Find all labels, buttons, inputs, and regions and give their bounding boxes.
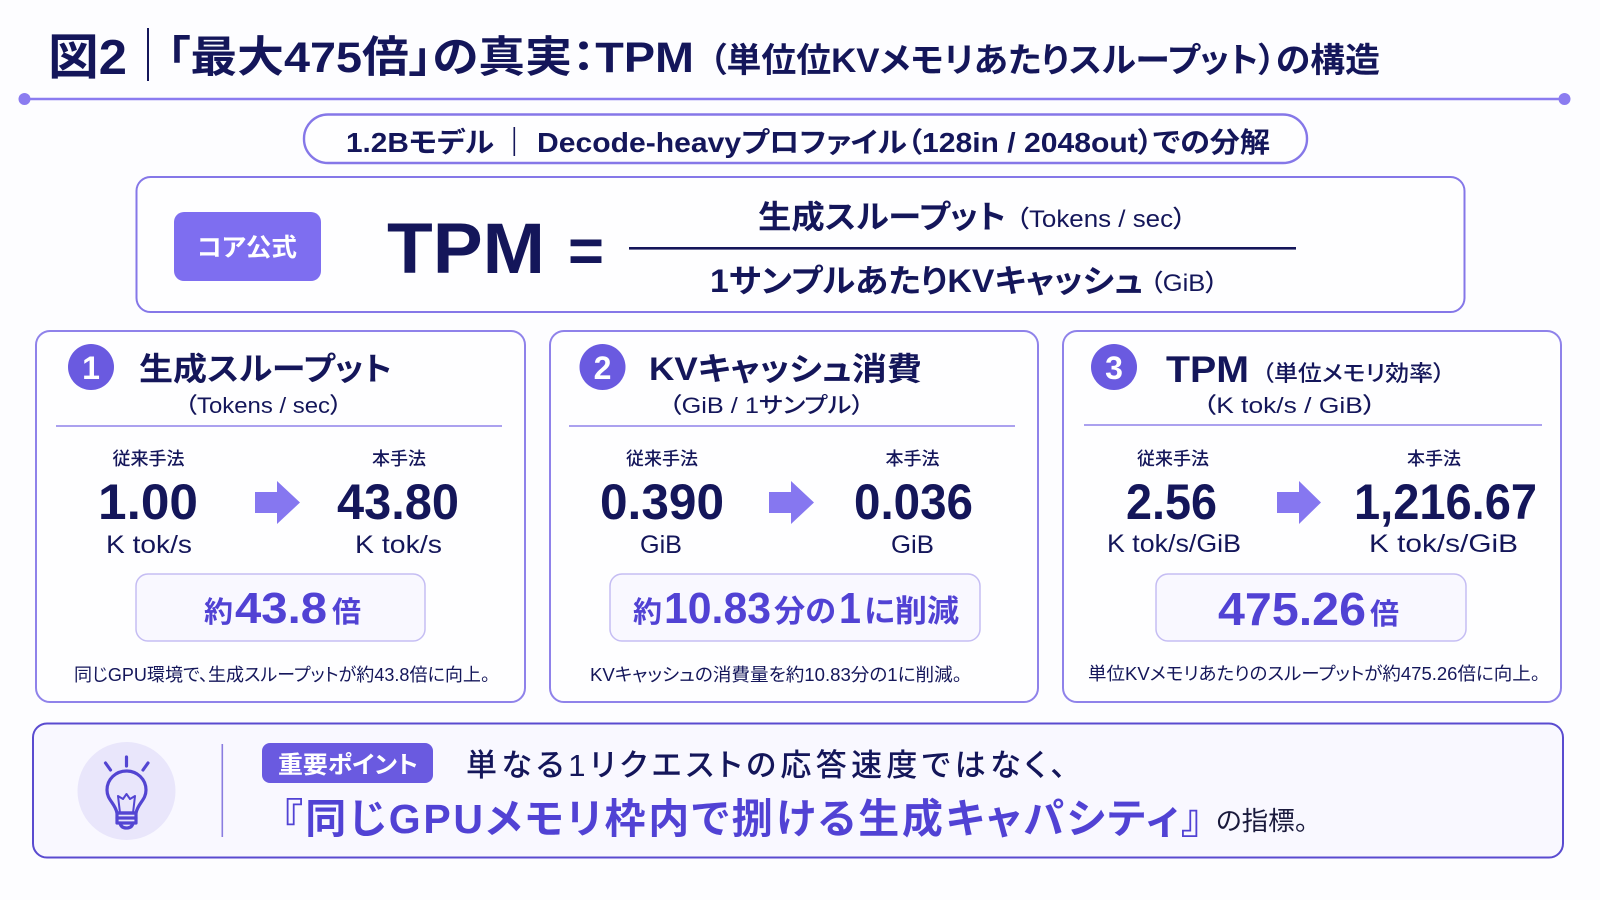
key point line 2 tail: の指標。 xyxy=(1216,806,1308,836)
proposed value: 本手法 xyxy=(886,449,940,469)
formula left side: TPM xyxy=(387,210,545,289)
icon: light bulb xyxy=(78,742,176,840)
proposed value: 0.036 xyxy=(854,474,973,530)
proposed value: 43.80 xyxy=(337,474,459,530)
baseline value: 従来手法 xyxy=(112,449,184,469)
panel: 2 KV cache xyxy=(550,331,1038,702)
card sub heading: （Tokens / sec） xyxy=(185,393,342,418)
numerator: 生成スループット xyxy=(758,199,1006,235)
figure number: 図2 xyxy=(48,31,127,85)
core formula badge: コア公式 xyxy=(197,234,297,262)
panel: 1 throughput xyxy=(36,331,525,702)
card sub heading: （K tok/s / GiB） xyxy=(1203,393,1376,418)
denominator: （GiB） xyxy=(1150,270,1218,297)
proposed value xyxy=(337,449,459,559)
result callout: 約 xyxy=(633,596,662,629)
result callout: 43.8 xyxy=(235,584,327,633)
baseline value: 2.56 xyxy=(1126,474,1217,530)
result callout: 10.83 xyxy=(664,584,771,633)
result callout: 1 xyxy=(839,584,861,633)
card sub heading: （GiB / 1サンプル） xyxy=(669,393,864,418)
proposed value: 本手法 xyxy=(1407,449,1461,469)
panel: 3 TPM xyxy=(1063,331,1561,702)
baseline value: GiB xyxy=(640,531,682,559)
card heading: 生成スループット xyxy=(139,351,392,387)
result callout: に削減 xyxy=(864,594,959,629)
result callout: 倍 xyxy=(1370,598,1399,631)
proposed value xyxy=(1354,449,1537,558)
baseline value: 1.00 xyxy=(98,474,198,530)
numerator: （Tokens / sec） xyxy=(1016,206,1186,233)
title sub text: （単位位KVメモリあたりスループット）の構造 xyxy=(709,42,1380,80)
key point line 1: 単なる1リクエストの応答速度ではなく、 xyxy=(466,748,1066,783)
result callout xyxy=(610,574,980,641)
number badge 1: 1 xyxy=(82,350,100,386)
key point line 2 emphasis: 『同じGPUメモリ枠内で捌ける生成キャパシティ』 xyxy=(282,796,1202,842)
panel: core formula xyxy=(136,177,1464,312)
core formula badge xyxy=(174,212,321,281)
title main text: 「最大475倍」の真実：TPM xyxy=(167,34,694,82)
baseline value xyxy=(1107,449,1241,558)
fraction bar xyxy=(629,247,1296,250)
result callout: 倍 xyxy=(332,596,361,629)
result callout xyxy=(136,574,425,641)
card heading note: （単位メモリ効率） xyxy=(1262,361,1445,386)
baseline value: K tok/s xyxy=(106,531,192,559)
equals sign: = xyxy=(568,217,604,286)
key point badge: 重要ポイント xyxy=(278,752,418,779)
result callout: 分の xyxy=(774,594,836,629)
number badge 2 xyxy=(580,344,626,390)
number badge 2: 2 xyxy=(594,350,611,386)
number badge 1 xyxy=(68,344,114,390)
arrow xyxy=(1277,481,1321,524)
card heading: TPM xyxy=(1166,349,1249,390)
title divider xyxy=(147,28,149,81)
arrow xyxy=(769,481,814,524)
baseline value xyxy=(600,449,724,559)
baseline value: 従来手法 xyxy=(626,449,698,469)
baseline value: 0.390 xyxy=(600,474,724,530)
number badge 3: 3 xyxy=(1105,350,1123,386)
key point badge xyxy=(262,743,433,783)
caption: 同じGPU環境で、生成スループットが約43.8倍に向上。 xyxy=(74,665,490,685)
proposed value: K tok/s xyxy=(355,531,442,559)
proposed value: K tok/s/GiB xyxy=(1369,530,1518,558)
result callout: 475.26 xyxy=(1218,583,1366,635)
proposed value: 1,216.67 xyxy=(1354,474,1537,530)
proposed value xyxy=(854,449,973,559)
baseline value: 従来手法 xyxy=(1137,449,1209,469)
result callout xyxy=(1156,574,1466,641)
subtitle pill: Decode-heavyプロファイル（128in / 2048out）での分解 xyxy=(537,127,1270,158)
numerator xyxy=(758,199,1186,235)
card heading: KVキャッシュ消費 xyxy=(649,351,922,387)
panel: key point xyxy=(33,724,1563,858)
subtitle pill xyxy=(304,114,1307,163)
number badge 3 xyxy=(1091,344,1137,390)
proposed value: GiB xyxy=(891,531,934,559)
result callout: 約 xyxy=(204,596,233,629)
title xyxy=(48,28,1380,85)
subtitle pill: 1.2Bモデル xyxy=(346,126,494,158)
denominator: 1サンプルあたりKVキャッシュ xyxy=(710,263,1143,299)
proposed value: 本手法 xyxy=(372,449,426,469)
caption: 単位KVメモリあたりのスループットが約475.26倍に向上。 xyxy=(1088,664,1540,684)
caption: KVキャッシュの消費量を約10.83分の1に削減。 xyxy=(590,665,962,685)
baseline value: K tok/s/GiB xyxy=(1107,530,1241,558)
baseline value xyxy=(98,449,198,559)
header rule with end dots xyxy=(18,93,1570,105)
arrow xyxy=(255,481,300,524)
